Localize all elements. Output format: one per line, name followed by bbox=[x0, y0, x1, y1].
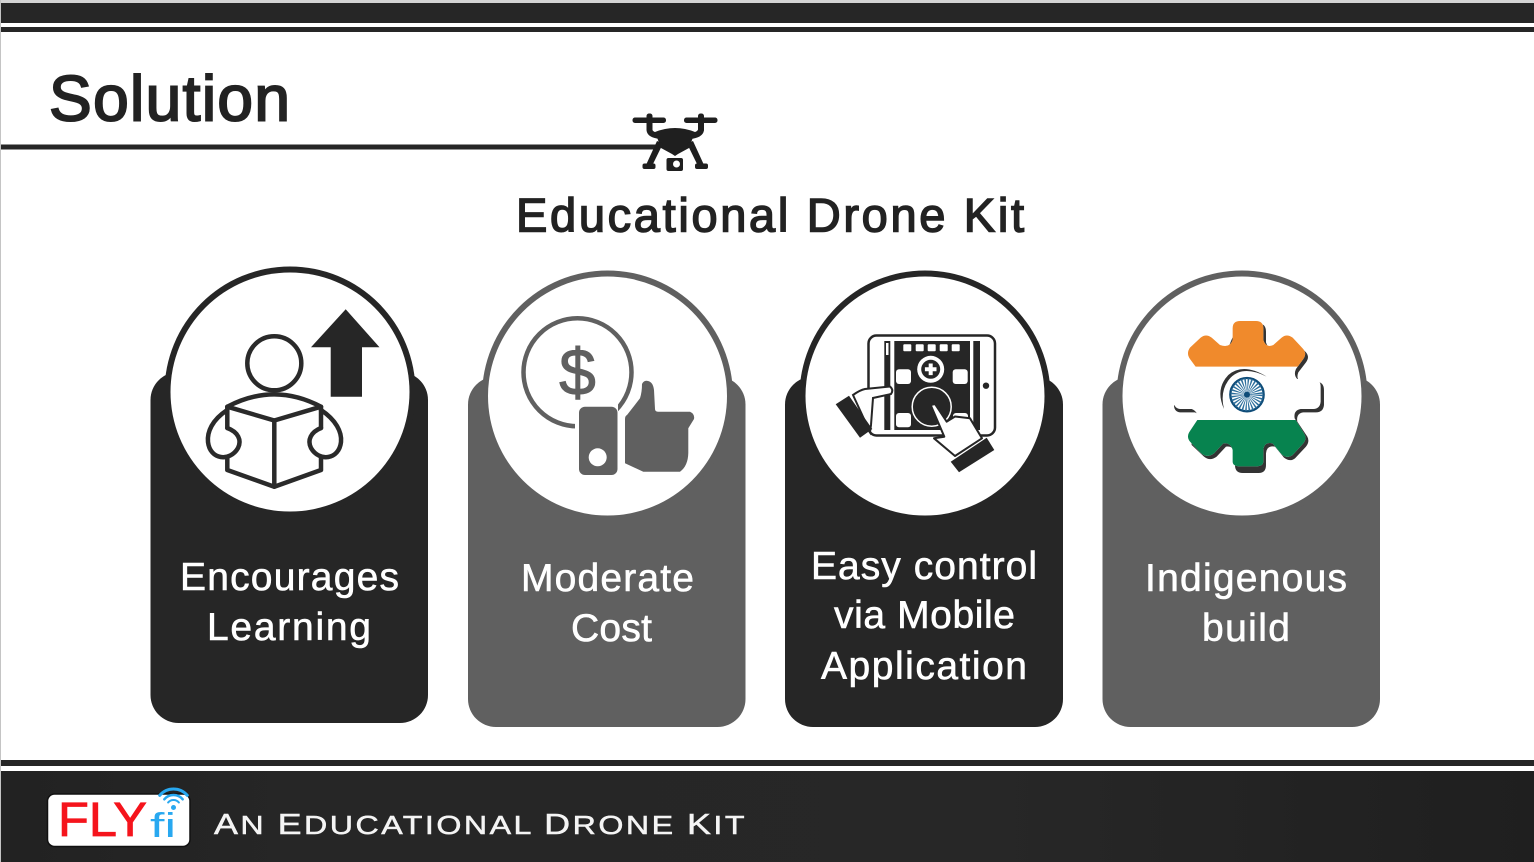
label: Encourages bbox=[180, 556, 399, 599]
panel: easy control bbox=[785, 270, 1063, 727]
logo: FLYfi: FLY bbox=[58, 794, 147, 847]
label: Cost bbox=[571, 607, 652, 650]
icon: dollar coin and thumbs up bbox=[524, 318, 694, 479]
top header bars bbox=[1, 3, 1534, 32]
icon: dollar coin and thumbs up: $ bbox=[559, 335, 596, 409]
logo: FLYfi: fi bbox=[150, 807, 176, 845]
panel: encourages learning bbox=[150, 266, 428, 723]
label: Easy control bbox=[811, 545, 1037, 588]
subtitle: Educational Drone Kit bbox=[516, 188, 1024, 242]
icon: India flag gear bbox=[1174, 321, 1324, 473]
title: Solution bbox=[49, 62, 290, 134]
panel: indigenous build bbox=[1102, 270, 1380, 727]
label: Learning bbox=[207, 606, 371, 649]
label bbox=[521, 557, 694, 650]
icon: drone bbox=[632, 114, 718, 171]
title underline bbox=[1, 144, 656, 150]
label: Application bbox=[821, 645, 1027, 688]
label bbox=[1145, 557, 1347, 650]
label bbox=[180, 556, 399, 649]
label: via Mobile bbox=[834, 594, 1015, 637]
label: build bbox=[1202, 607, 1290, 650]
label bbox=[811, 545, 1037, 688]
panel: moderate cost bbox=[468, 270, 746, 727]
logo: FLYfi bbox=[48, 789, 190, 847]
footer bars bbox=[1, 760, 1534, 862]
label: Moderate bbox=[521, 557, 694, 600]
label: Indigenous bbox=[1145, 557, 1347, 600]
icon: tablet with hands bbox=[836, 336, 995, 472]
icon: reader with up arrow bbox=[208, 309, 380, 487]
footer tagline: AN EDUCATIONAL DRONE KIT bbox=[214, 809, 747, 841]
